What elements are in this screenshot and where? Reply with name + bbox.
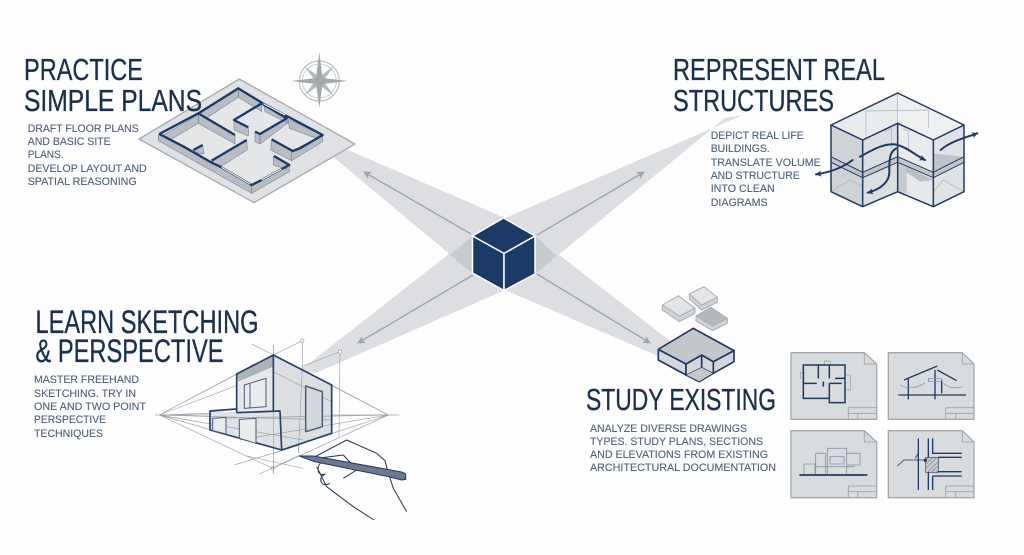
text: practice simple plans [28, 123, 147, 188]
illustration: isometric building section [816, 93, 977, 207]
text: learn sketching and perspective: TECHNIQUES [34, 428, 103, 440]
heading: practice simple plans [24, 52, 202, 118]
text: learn sketching and perspective: ONE AND TWO POINT [34, 401, 146, 413]
icon: central cube [472, 218, 535, 290]
plan base sheet [139, 79, 355, 203]
card: floor plan [791, 353, 877, 419]
lines through house [159, 345, 388, 474]
text: represent real structures: BUILDINGS. [711, 143, 770, 155]
heading: study existing: STUDY EXISTING [586, 382, 776, 417]
text: represent real structures [711, 130, 821, 209]
text: represent real structures: DEPICT REAL LIFE [711, 130, 804, 142]
wall tops [159, 88, 323, 185]
construction lines [155, 339, 399, 474]
text: study existing: ARCHITECTURAL DOCUMENTATION [590, 462, 776, 474]
text: practice simple plans: DEVELOP LAYOUT AND [28, 163, 147, 175]
house faces [273, 355, 332, 450]
text: learn sketching and perspective [34, 374, 146, 440]
text: learn sketching and perspective: MASTER FREEHAND [34, 374, 139, 386]
text: practice simple plans: DRAFT FLOOR PLANS [28, 123, 139, 135]
text: represent real structures: AND STRUCTURE [711, 170, 800, 182]
main block [658, 328, 734, 382]
heading: represent real structures [673, 52, 885, 118]
flow arrows [816, 133, 977, 193]
light beams radiating from centre [298, 115, 743, 373]
text: study existing: AND ELEVATIONS FROM EXISTING [590, 449, 768, 461]
heading: represent real structures: REPRESENT REAL [673, 52, 885, 87]
document cards: existing drawings [791, 353, 974, 498]
text: represent real structures: TRANSLATE VOLUME [711, 157, 821, 169]
icon: compass rose [291, 52, 348, 108]
illustration: isometric floor plan [139, 79, 355, 203]
hand outline [315, 440, 407, 520]
text: practice simple plans: SPATIAL REASONING [28, 176, 137, 188]
text: represent real structures: DIAGRAMS [711, 197, 768, 209]
heading: learn sketching and perspective: & PERSPECTIVE [36, 333, 224, 369]
illustration: perspective sketch with hand [155, 339, 407, 520]
building volume [831, 93, 964, 207]
heading: learn sketching and perspective [36, 304, 258, 369]
text: study existing: TYPES. STUDY PLANS, SECTIONS [590, 436, 763, 448]
text: study existing [590, 423, 776, 474]
heading: practice simple plans: PRACTICE [24, 52, 143, 87]
window strips [222, 103, 287, 184]
text: practice simple plans: PLANS. [28, 149, 64, 161]
text: learn sketching and perspective: PERSPECTIVE [34, 414, 106, 426]
text: practice simple plans: AND BASIC SITE [28, 136, 111, 148]
card: detail [888, 431, 974, 498]
small blocks [662, 287, 727, 331]
heading: practice simple plans: SIMPLE PLANS [24, 83, 202, 118]
text: represent real structures: INTO CLEAN [711, 183, 775, 195]
card: elevation [791, 431, 877, 498]
text: study existing: ANALYZE DIVERSE DRAWINGS [590, 423, 747, 435]
illustration: massing blocks [658, 287, 734, 382]
text: learn sketching and perspective: SKETCHING. TRY IN [34, 388, 136, 400]
card: section [888, 353, 974, 419]
pencil [299, 456, 406, 480]
arrows from cube [358, 172, 650, 343]
heading: learn sketching and perspective: LEARN SKETCHING [36, 304, 258, 340]
heading: represent real structures: STRUCTURES [673, 83, 834, 118]
wall faces [158, 88, 323, 193]
